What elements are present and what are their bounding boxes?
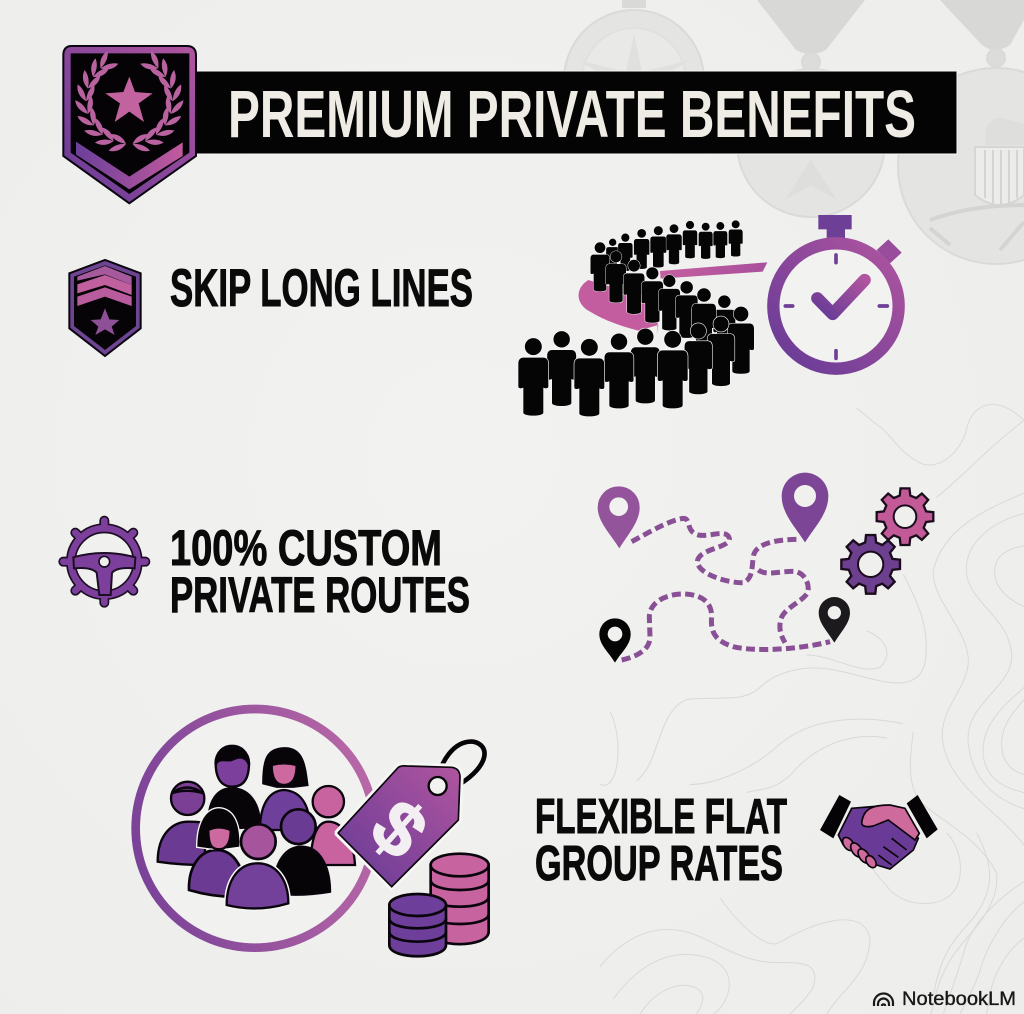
badge star	[105, 77, 153, 122]
wheel spokes and hub	[73, 553, 135, 595]
icon: stopwatch with check mark	[773, 215, 902, 369]
coin stack: purple	[389, 894, 446, 956]
fingers	[840, 835, 878, 870]
illustration: route map	[598, 473, 933, 663]
heading: custom private routes: PRIVATE ROUTES	[170, 567, 470, 623]
pin: start left	[598, 486, 640, 548]
title bar	[190, 71, 957, 154]
laurel wreath	[75, 51, 184, 153]
circle ring	[136, 709, 374, 948]
front people	[189, 808, 330, 908]
group of people	[158, 746, 355, 865]
back row of people	[606, 220, 743, 272]
icon: steering wheel gear	[63, 521, 145, 603]
background medals	[564, 0, 1024, 264]
medal: right with eagle	[898, 0, 1024, 264]
pink path swoosh	[579, 262, 767, 335]
gear: purple	[841, 535, 900, 594]
front row of people	[518, 307, 754, 416]
price tag	[338, 742, 485, 887]
logo arcs	[874, 994, 893, 1006]
middle row of people	[590, 242, 735, 352]
dollar sign: $	[354, 784, 443, 875]
heading: custom private routes	[170, 520, 470, 623]
icon: small chevron badge	[69, 260, 141, 356]
gear: pink	[877, 488, 933, 545]
topographic contour lines	[600, 405, 1024, 1014]
heading: custom private routes: 100% CUSTOM	[170, 520, 442, 576]
heading: flexible flat group rates	[535, 790, 787, 891]
heading: flexible flat group rates: FLEXIBLE FLAT	[535, 790, 787, 844]
logo: NotebookLM: NotebookLM	[902, 989, 1016, 1010]
dashed routes	[622, 518, 830, 660]
clock ticks	[785, 255, 887, 358]
illustration: group with price tag and coins	[136, 709, 489, 956]
pin: top right	[782, 473, 828, 542]
coin stack: pink	[431, 854, 489, 944]
finger creases	[878, 838, 907, 865]
pin: bottom left	[599, 618, 631, 663]
pink hand	[862, 805, 919, 840]
small star	[91, 308, 119, 335]
illustration: crowd queue	[518, 220, 767, 416]
medal: left	[564, 0, 704, 150]
chevron stripes	[77, 266, 132, 306]
cuffs	[820, 795, 938, 838]
pin: bottom right	[819, 597, 850, 643]
chevron	[76, 142, 183, 189]
medal: centre	[737, 0, 885, 217]
heading: flexible flat group rates: GROUP RATES	[535, 837, 783, 891]
heading: skip long lines: SKIP LONG LINES	[170, 259, 473, 318]
icon: handshake	[820, 795, 938, 870]
purple hand	[838, 806, 918, 869]
check mark	[817, 280, 865, 314]
icon: rank badge with star and laurel	[63, 46, 196, 203]
